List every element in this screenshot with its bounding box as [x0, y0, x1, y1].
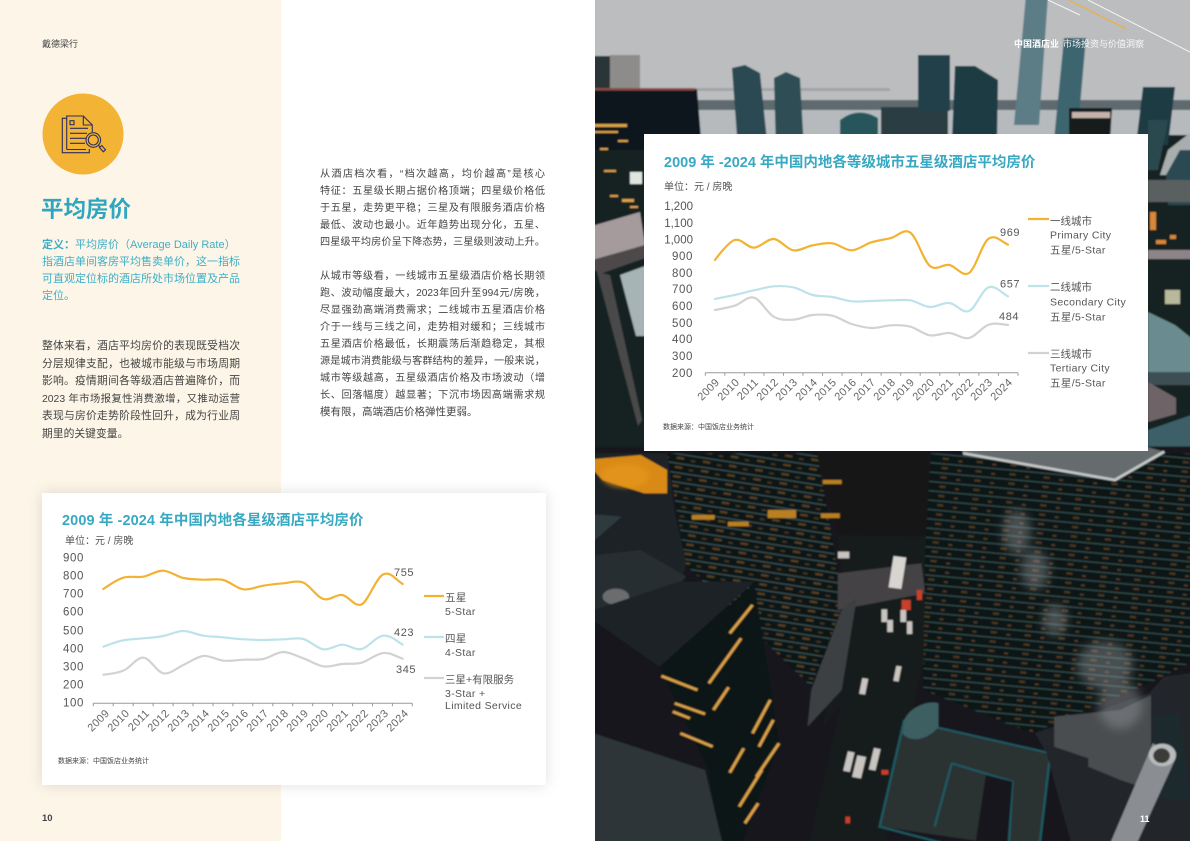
legend: tertiary city: 五星/5-Star [1050, 378, 1106, 390]
text block: overall summary [42, 340, 240, 440]
legend: three star and limited service [424, 673, 522, 712]
brand name: 戴德梁行 [42, 39, 78, 49]
text block: overall summary: 表现与房价走势阶段性回升，成为行业周 [42, 410, 240, 422]
text block: by hotel grade: 四星级平均房价呈下降态势，三星级则波动上升。 [320, 237, 545, 248]
x axis labels: 2021 [929, 377, 956, 403]
legend: secondary city: 五星/5-Star [1050, 312, 1106, 324]
smoke plume [1003, 510, 1142, 729]
x axis labels: 2022 [344, 708, 371, 734]
value labels: 484 [999, 311, 1019, 323]
legend: five star [424, 592, 476, 618]
x axis labels: 2024 [384, 708, 411, 734]
x axis labels: 2022 [949, 377, 976, 403]
text block: overall summary: 整体来看，酒店平均房价的表现既受档次 [42, 340, 240, 352]
y axis labels: 1,200 [664, 201, 693, 213]
x axis labels: 2017 [851, 377, 878, 403]
text block: overall summary: 期里的关键变量。 [42, 428, 128, 440]
text block: by hotel grade: 从酒店档次看，“档次越高，均价越高”是核心 [320, 169, 545, 180]
legend: tertiary city [1028, 348, 1110, 390]
y axis labels: 800 [672, 268, 693, 280]
x axis labels: 2013 [165, 708, 192, 734]
text block: by city tier: 源是城市消费能级与客群结构的差异，一般来说， [320, 356, 545, 367]
x axis labels: 2015 [205, 708, 232, 734]
text block: by city tier: 介于一线与三线之间，走势相对缓和；三线城市 [320, 322, 545, 333]
text block: definition: 指酒店单间客房平均售卖单价，这一指标 [42, 256, 240, 268]
y axis labels: 1,000 [664, 234, 693, 246]
chart heading: 2009 年 -2024 年中国内地各星级酒店平均房价 [62, 513, 364, 529]
warm street glow [601, 464, 649, 488]
y axis labels: 200 [672, 368, 693, 380]
x axis labels: 2017 [244, 708, 271, 734]
backdrop [595, 0, 1190, 841]
x axis labels: 2015 [812, 377, 839, 403]
header: report title: 中国酒店业 市场投资与价值洞察 [1014, 39, 1144, 49]
skyline and side scenery [580, 0, 1190, 841]
x axis labels: 2019 [284, 708, 311, 734]
x axis labels: 2023 [364, 708, 391, 734]
text block: by city tier: 长、回落幅度）越显著；下沉市场因高端需求规 [320, 390, 545, 401]
legend: three star and limited service: 三星+有限服务 [445, 673, 515, 686]
text block: by city tier [320, 270, 545, 418]
unit label: 单位：元 / 房晚 [664, 182, 732, 192]
legend: secondary city [1028, 280, 1126, 324]
line chart: average rate by star rating [63, 552, 522, 734]
x axis labels: 2019 [890, 377, 917, 403]
white accent line [1048, 0, 1080, 15]
y axis labels: 400 [63, 644, 84, 656]
x axis labels: 2016 [224, 708, 251, 734]
white accent line long [1088, 0, 1190, 52]
text block: overall summary: 2023 年市场报复性消费激增，又推动运营 [42, 394, 240, 405]
chart heading: 2009 年 -2024 年中国内地各等级城市五星级酒店平均房价 [664, 154, 1035, 170]
value labels [394, 567, 416, 676]
y axis labels: 200 [63, 680, 84, 692]
value labels [999, 227, 1020, 323]
legend: five star: 五星 [445, 592, 467, 604]
x axis labels: 2011 [735, 377, 761, 403]
x axis labels: 2014 [185, 708, 212, 734]
value labels: 969 [1000, 227, 1020, 239]
series lines [715, 231, 1008, 338]
x axis labels: 2024 [988, 377, 1015, 403]
y axis labels: 500 [672, 318, 693, 330]
x axis labels: 2020 [304, 708, 331, 734]
x axis labels: 2021 [324, 708, 351, 734]
x axis labels [695, 377, 1015, 403]
lower city scene [584, 447, 1190, 841]
x axis labels: 2010 [715, 377, 742, 403]
x axis labels: 2009 [85, 708, 112, 734]
x axis labels: 2013 [773, 377, 800, 403]
text block: by hotel grade [320, 168, 545, 248]
panel: left page cream band [0, 0, 281, 841]
x axis labels: 2012 [754, 377, 781, 403]
y axis labels: 100 [63, 698, 84, 710]
page number 10: 10 [42, 812, 53, 824]
y axis labels: 900 [63, 552, 84, 564]
value labels: 657 [1000, 278, 1020, 290]
photo: aerial city at dusk [595, 0, 1190, 841]
legend: five star: 5-Star [445, 606, 476, 618]
value labels: 755 [394, 567, 414, 579]
legend: three star and limited service: Limited Service [445, 700, 522, 712]
y axis labels: 300 [63, 662, 84, 674]
x axis labels: 2020 [910, 377, 937, 403]
y axis labels: 1,100 [664, 218, 693, 230]
source note: 数据来源：中国饭店业务统计 [663, 424, 754, 430]
legend: three star and limited service: 3-Star + [445, 688, 485, 700]
legend: four star [424, 633, 476, 659]
text block: by hotel grade: 于五星，走势更平稳；三星及有限服务酒店价格 [320, 203, 545, 214]
value labels: 423 [394, 627, 414, 639]
x axis labels: 2012 [145, 708, 172, 734]
text block: by city tier: 从城市等级看，一线城市五星级酒店价格长期领 [320, 271, 545, 282]
value labels: 345 [396, 664, 416, 676]
legend: secondary city: Secondary City [1050, 296, 1126, 308]
y axis labels: 900 [672, 251, 693, 263]
text block: definition: 定位。 [42, 290, 75, 302]
x axis labels: 2009 [695, 377, 722, 403]
heading: average room rate: 平均房价 [41, 196, 131, 222]
legend: primary city: 一线城市 [1050, 214, 1092, 228]
panel: star rating chart card [42, 493, 546, 785]
legend: primary city [1028, 214, 1112, 256]
y axis labels [664, 201, 693, 380]
text block: by city tier: 城市等级越高，五星级酒店价格及市场波动（增 [320, 373, 545, 384]
text block: by city tier: 五星酒店价格最低，长期震荡后渐趋稳定，其根 [320, 339, 545, 350]
icon: document with magnifier [42, 94, 124, 174]
x axis labels: 2023 [968, 377, 995, 403]
line chart: five star rate by city tier [664, 201, 1126, 403]
text block: by city tier: 尽显强劲高端消费需求；二线城市五星酒店价格 [320, 305, 545, 316]
y axis labels: 600 [63, 606, 84, 618]
y axis labels: 500 [63, 626, 84, 638]
legend: tertiary city: Tertiary City [1050, 362, 1110, 374]
source note: 数据来源：中国饭店业务统计 [58, 758, 149, 764]
legend: secondary city: 二线城市 [1050, 280, 1092, 294]
y axis labels [63, 552, 84, 710]
y axis labels: 700 [672, 284, 693, 296]
x axis labels: 2018 [264, 708, 291, 734]
x axis labels [85, 708, 411, 734]
y axis labels: 600 [672, 301, 693, 313]
text block: by city tier: 模有限，高端酒店价格弹性更弱。 [320, 406, 478, 418]
legend: four star: 4-Star [445, 647, 476, 659]
y axis labels: 300 [672, 351, 693, 363]
legend: primary city: Primary City [1050, 230, 1112, 242]
y axis labels: 700 [63, 588, 84, 600]
x axis labels: 2011 [126, 708, 152, 734]
legend: tertiary city: 三线城市 [1050, 348, 1092, 360]
text block: by city tier: 跑、波动幅度最大，2023年回升至994元/房晚， [320, 288, 545, 299]
y axis labels: 800 [63, 570, 84, 582]
text block: overall summary: 影响。疫情期间各等级酒店普遍降价，而 [42, 375, 240, 387]
text block: overall summary: 分层规律支配，也被城市能级与市场周期 [42, 358, 240, 370]
x axis labels: 2018 [871, 377, 898, 403]
text block: by hotel grade: 最低、波动也最小。近年趋势出现分化，五星、 [320, 220, 545, 231]
series lines [103, 571, 403, 675]
orange accent line [1069, 0, 1126, 29]
x axis labels: 2014 [793, 377, 820, 403]
y axis labels: 400 [672, 334, 693, 346]
legend: primary city: 五星/5-Star [1050, 244, 1106, 256]
page number 11: 11 [1140, 814, 1150, 824]
text block: definition: 定义：平均房价（Average Daily Rate） [42, 238, 236, 250]
x axis labels: 2010 [105, 708, 132, 734]
legend: four star: 四星 [445, 633, 467, 645]
text block: definition [42, 238, 240, 302]
panel: city tier chart card [644, 134, 1148, 451]
text block: by hotel grade: 特征：五星级长期占据价格顶端；四星级价格低 [320, 186, 545, 197]
unit label: 单位：元 / 房晚 [65, 536, 133, 546]
text block: definition: 可直观定位标的酒店所处市场位置及产品 [42, 272, 240, 284]
x axis labels: 2016 [832, 377, 859, 403]
